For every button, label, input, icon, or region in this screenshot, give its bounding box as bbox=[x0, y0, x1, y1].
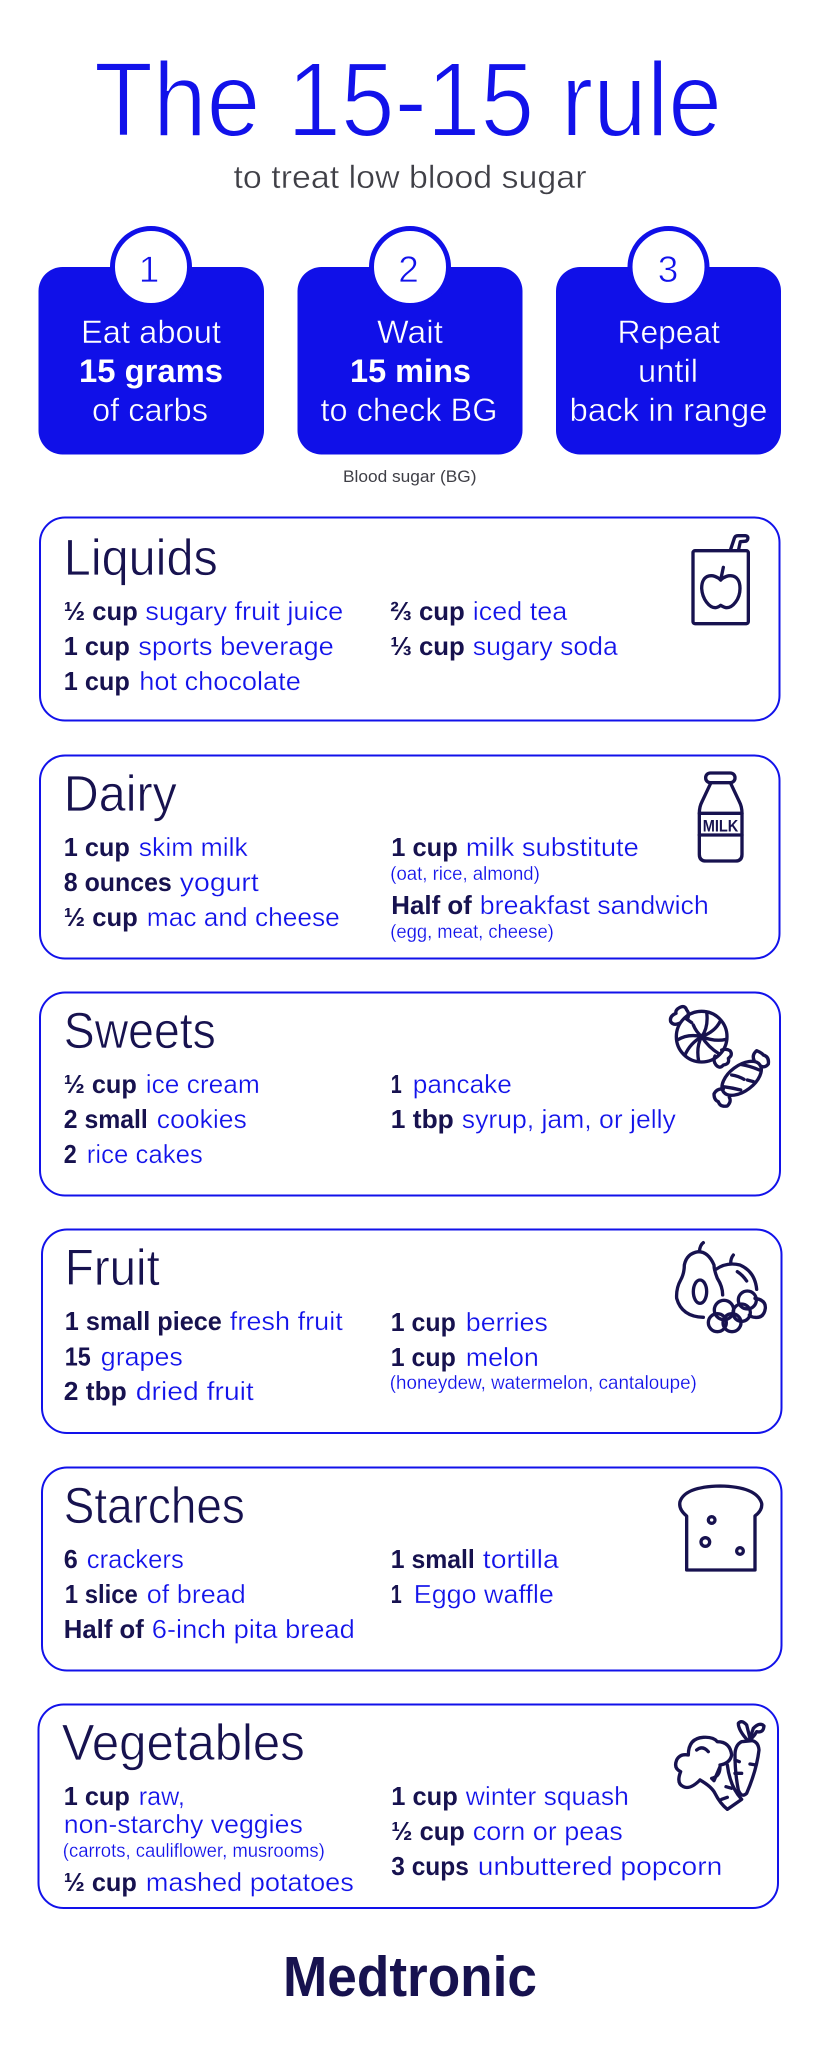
item: pita bread: Half of bbox=[64, 1614, 144, 1644]
item: popcorn: 3 cups bbox=[391, 1851, 469, 1881]
item: pancake: 1 bbox=[391, 1069, 402, 1099]
logo: Medtronic: Medtronic bbox=[283, 1945, 537, 2009]
item: mac and cheese bbox=[64, 902, 340, 932]
item: popcorn bbox=[391, 1851, 722, 1881]
icon: candies bbox=[670, 1007, 768, 1106]
item: milk substitute: milk substitute bbox=[466, 832, 639, 862]
item: cookies bbox=[64, 1104, 247, 1134]
item: winter squash: winter squash bbox=[465, 1781, 629, 1811]
panel: Fruit bbox=[42, 1230, 782, 1433]
item: corn or peas bbox=[391, 1816, 623, 1846]
step 3 card: Repeat bbox=[618, 314, 720, 350]
item: milk substitute: (oat, rice, almond) bbox=[390, 864, 540, 885]
item: waffle: Eggo waffle bbox=[414, 1579, 554, 1609]
step 2 card: to check BG bbox=[320, 392, 498, 428]
item: bread slice: of bread bbox=[147, 1579, 246, 1609]
icon: bread bbox=[680, 1486, 762, 1570]
panel: Starches bbox=[42, 1468, 782, 1670]
item: sports beverage bbox=[64, 631, 334, 661]
step 2 card: Wait bbox=[377, 314, 443, 350]
item: crackers: crackers bbox=[87, 1544, 184, 1574]
item: pancake: pancake bbox=[413, 1069, 512, 1099]
title: The 15-15 rule bbox=[94, 41, 722, 159]
item: sports beverage: sports beverage bbox=[138, 631, 334, 661]
panel: Sweets bbox=[40, 992, 780, 1196]
footnote: blood sugar abbreviation: Blood sugar (BG) bbox=[343, 467, 476, 486]
icon: milk bottle: MILK bbox=[703, 817, 739, 836]
item: melon: melon bbox=[466, 1342, 539, 1372]
item: grapes bbox=[65, 1342, 183, 1372]
item: dried fruit: dried fruit bbox=[136, 1376, 255, 1406]
item: waffle: 1 bbox=[391, 1579, 402, 1609]
item: breakfast sandwich: breakfast sandwich bbox=[480, 890, 709, 920]
item: yogurt bbox=[64, 867, 260, 897]
item: fruit juice: sugary fruit juice bbox=[145, 596, 343, 626]
item: bread slice bbox=[65, 1579, 246, 1609]
step 1 card: 15 grams bbox=[79, 353, 223, 389]
item: mac and cheese: ½ cup bbox=[64, 902, 138, 932]
panel: Liquids bbox=[40, 518, 780, 720]
item: tortilla bbox=[391, 1544, 559, 1574]
item: berries bbox=[391, 1307, 548, 1337]
item: ice cream: ½ cup bbox=[64, 1069, 137, 1099]
item: melon: 1 cup bbox=[391, 1342, 456, 1372]
item: bread slice: 1 slice bbox=[65, 1579, 138, 1609]
item: corn or peas: ½ cup bbox=[391, 1816, 465, 1846]
icon: broccoli and carrot bbox=[676, 1722, 764, 1809]
item: breakfast sandwich: Half of bbox=[391, 890, 472, 920]
item: sugary soda: sugary soda bbox=[473, 631, 618, 661]
step 1 card: 1 bbox=[139, 249, 159, 290]
panel: Liquids: Liquids bbox=[64, 529, 218, 586]
item: cookies: cookies bbox=[157, 1104, 247, 1134]
item: yogurt: 8 ounces bbox=[64, 867, 172, 897]
panel: Vegetables bbox=[38, 1704, 778, 1908]
panel: Fruit: Fruit bbox=[65, 1239, 160, 1296]
item: skim milk: 1 cup bbox=[64, 832, 130, 862]
step 3 card: until bbox=[638, 353, 698, 389]
item: dried fruit bbox=[64, 1376, 255, 1406]
item: mashed potatoes: ½ cup bbox=[64, 1867, 137, 1897]
item: raw veggies bbox=[63, 1781, 325, 1862]
item: iced tea: iced tea bbox=[473, 596, 568, 626]
panel: Dairy: Dairy bbox=[64, 765, 177, 822]
item: pita bread: 6-inch pita bread bbox=[152, 1614, 355, 1644]
step 3 card: 3 bbox=[658, 249, 678, 290]
item: skim milk: skim milk bbox=[139, 832, 249, 862]
step 2 card: 2 bbox=[398, 249, 419, 290]
item: popcorn: unbuttered popcorn bbox=[478, 1851, 722, 1881]
icon: juice box bbox=[693, 536, 748, 624]
item: hot chocolate bbox=[64, 666, 301, 696]
step 1 card: Eat about bbox=[81, 314, 221, 350]
item: corn or peas: corn or peas bbox=[473, 1816, 623, 1846]
item: hot chocolate: 1 cup bbox=[64, 666, 130, 696]
item: yogurt: yogurt bbox=[180, 867, 260, 897]
item: dried fruit: 2 tbp bbox=[64, 1376, 127, 1406]
item: raw veggies: non-starchy veggies bbox=[64, 1809, 303, 1839]
item: ice cream bbox=[64, 1069, 260, 1099]
item: iced tea: ⅔ cup bbox=[390, 596, 465, 626]
step 1 card: of carbs bbox=[92, 392, 208, 428]
item: sugary soda: ⅓ cup bbox=[390, 631, 465, 661]
step 2 card: 15 mins bbox=[350, 353, 471, 389]
item: mashed potatoes: mashed potatoes bbox=[146, 1867, 354, 1897]
panel: Vegetables: Vegetables bbox=[62, 1714, 305, 1771]
item: breakfast sandwich: (egg, meat, cheese) bbox=[390, 922, 554, 943]
item: sports beverage: 1 cup bbox=[64, 631, 130, 661]
item: berries: berries bbox=[466, 1307, 548, 1337]
item: hot chocolate: hot chocolate bbox=[139, 666, 301, 696]
item: melon bbox=[390, 1342, 697, 1394]
step 3 card: back in range bbox=[570, 392, 768, 428]
panel: Sweets: Sweets bbox=[64, 1002, 216, 1059]
item: milk substitute: 1 cup bbox=[391, 832, 458, 862]
item: fruit juice bbox=[64, 596, 343, 626]
item: pita bread bbox=[64, 1614, 355, 1644]
icon: fruit bbox=[677, 1243, 765, 1332]
step 2 card bbox=[298, 228, 522, 454]
item: winter squash: 1 cup bbox=[391, 1781, 458, 1811]
item: rice cakes: rice cakes bbox=[87, 1139, 203, 1169]
item: raw veggies: raw, bbox=[139, 1781, 185, 1811]
item: fruit juice: ½ cup bbox=[64, 596, 138, 626]
item: milk substitute bbox=[390, 832, 639, 885]
item: skim milk bbox=[64, 832, 249, 862]
panel: Dairy bbox=[40, 756, 780, 958]
item: syrup: syrup, jam, or jelly bbox=[462, 1104, 676, 1134]
item: tortilla: 1 small bbox=[391, 1544, 475, 1574]
item: melon: (honeydew, watermelon, cantaloupe) bbox=[390, 1373, 697, 1394]
item: fresh fruit: 1 small piece bbox=[65, 1306, 222, 1336]
item: raw veggies: (carrots, cauliflower, musrooms) bbox=[63, 1841, 325, 1862]
item: iced tea bbox=[390, 596, 568, 626]
item: syrup: 1 tbp bbox=[391, 1104, 454, 1134]
item: fresh fruit bbox=[65, 1306, 344, 1336]
item: rice cakes: 2 bbox=[64, 1139, 77, 1169]
icon: milk bottle bbox=[699, 773, 742, 861]
step 1 card bbox=[38, 228, 264, 454]
subtitle: to treat low blood sugar bbox=[234, 159, 587, 195]
item: ice cream: ice cream bbox=[146, 1069, 260, 1099]
item: grapes: 15 bbox=[65, 1342, 91, 1372]
item: winter squash bbox=[391, 1781, 629, 1811]
item: sugary soda bbox=[390, 631, 618, 661]
item: fresh fruit: fresh fruit bbox=[230, 1306, 344, 1336]
item: cookies: 2 small bbox=[64, 1104, 148, 1134]
item: tortilla: tortilla bbox=[483, 1544, 559, 1574]
step 3 card bbox=[556, 228, 781, 454]
item: grapes: grapes bbox=[101, 1342, 183, 1372]
item: breakfast sandwich bbox=[390, 890, 709, 943]
item: raw veggies: 1 cup bbox=[64, 1781, 130, 1811]
item: mac and cheese: mac and cheese bbox=[147, 902, 340, 932]
item: berries: 1 cup bbox=[391, 1307, 456, 1337]
item: mashed potatoes bbox=[64, 1867, 354, 1897]
panel: Starches: Starches bbox=[64, 1477, 245, 1534]
item: crackers: 6 bbox=[64, 1544, 78, 1574]
